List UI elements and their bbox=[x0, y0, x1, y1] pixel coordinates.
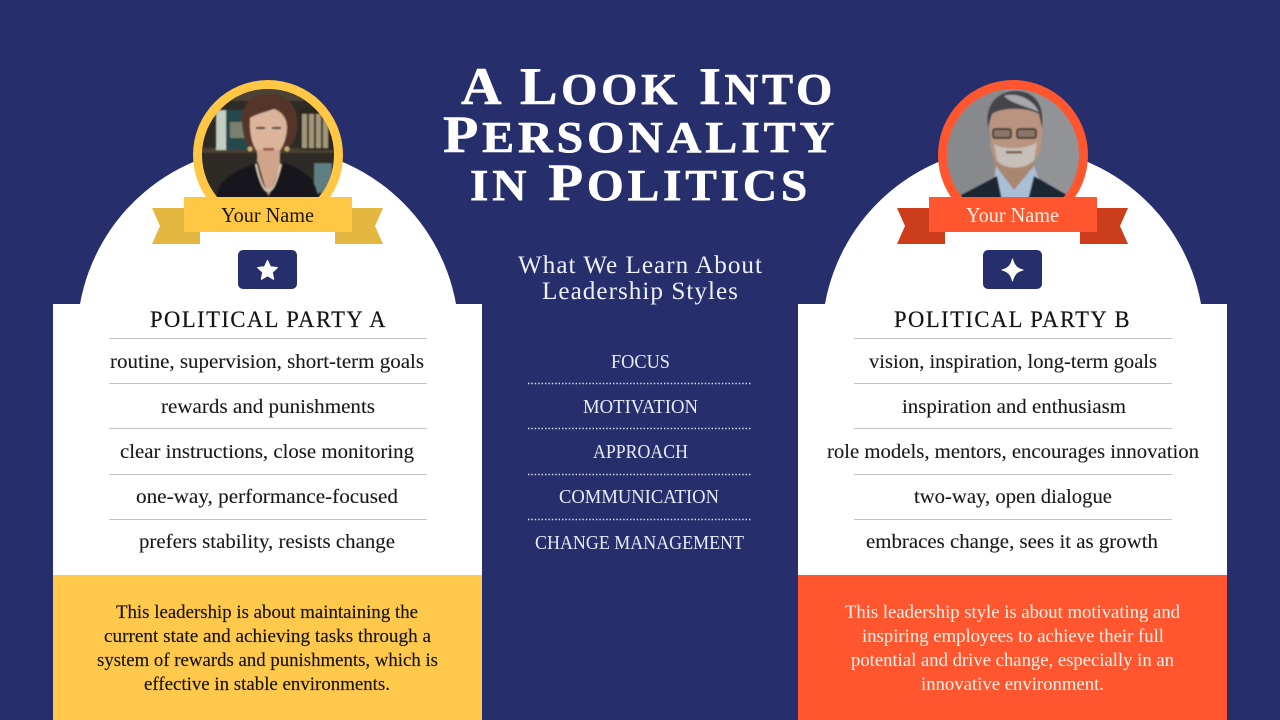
photo: man with glasses bbox=[938, 80, 1088, 197]
summary box: effective in stable environments. bbox=[144, 675, 390, 695]
comparison rows bbox=[109, 338, 427, 553]
summary box: This leadership is about maintaining the bbox=[116, 603, 418, 623]
icon: star badge bbox=[238, 250, 297, 289]
icon: four-point sparkle badge bbox=[983, 250, 1042, 289]
subtitle: What We Learn About bbox=[518, 252, 763, 279]
comparison rows: role models, mentors, encourages innovation bbox=[827, 441, 1199, 463]
title bbox=[443, 58, 838, 212]
summary box: This leadership style is about motivating and bbox=[845, 603, 1181, 623]
comparison rows: clear instructions, close monitoring bbox=[120, 441, 414, 463]
summary box: potential and drive change, especially in an bbox=[851, 651, 1174, 671]
center category list: FOCUS bbox=[611, 351, 670, 373]
summary box: innovative environment. bbox=[921, 675, 1104, 695]
summary box bbox=[53, 575, 482, 720]
panel: political party B bbox=[798, 80, 1227, 720]
comparison rows: embraces change, sees it as growth bbox=[866, 531, 1158, 553]
ribbon with name bbox=[897, 197, 1128, 244]
title: IN POLITICS bbox=[470, 154, 811, 212]
center category list: CHANGE MANAGEMENT bbox=[535, 532, 744, 554]
comparison rows: inspiration and enthusiasm bbox=[902, 396, 1126, 418]
photo: woman in library bbox=[193, 80, 343, 197]
comparison rows bbox=[827, 338, 1199, 553]
center category list: MOTIVATION bbox=[583, 396, 698, 418]
title: A LOOK INTO bbox=[461, 58, 836, 116]
ribbon with name: Your Name bbox=[966, 203, 1059, 227]
arch and table background bbox=[53, 147, 482, 575]
center category list: APPROACH bbox=[593, 441, 688, 463]
comparison rows: rewards and punishments bbox=[161, 396, 375, 418]
comparison rows: two-way, open dialogue bbox=[914, 486, 1112, 508]
heading: POLITICAL PARTY B bbox=[894, 307, 1131, 332]
center category list: COMMUNICATION bbox=[559, 486, 719, 508]
summary box: current state and achieving tasks through a bbox=[104, 627, 431, 647]
ribbon with name bbox=[152, 197, 383, 244]
panel: political party A bbox=[53, 80, 482, 720]
summary box: system of rewards and punishments, which is bbox=[97, 651, 438, 671]
ribbon with name: Your Name bbox=[221, 203, 314, 227]
title: PERSONALITY bbox=[443, 106, 838, 164]
subtitle: Leadership Styles bbox=[542, 278, 739, 305]
center category list bbox=[528, 351, 751, 554]
comparison rows: vision, inspiration, long-term goals bbox=[869, 351, 1157, 373]
arch and table background bbox=[798, 147, 1227, 575]
comparison rows: routine, supervision, short-term goals bbox=[110, 351, 424, 373]
heading: POLITICAL PARTY A bbox=[150, 307, 387, 332]
subtitle bbox=[518, 252, 763, 305]
comparison rows: one-way, performance-focused bbox=[136, 486, 398, 508]
summary box bbox=[798, 575, 1227, 720]
summary box: inspiring employees to achieve their full bbox=[862, 627, 1164, 647]
comparison rows: prefers stability, resists change bbox=[139, 531, 395, 553]
